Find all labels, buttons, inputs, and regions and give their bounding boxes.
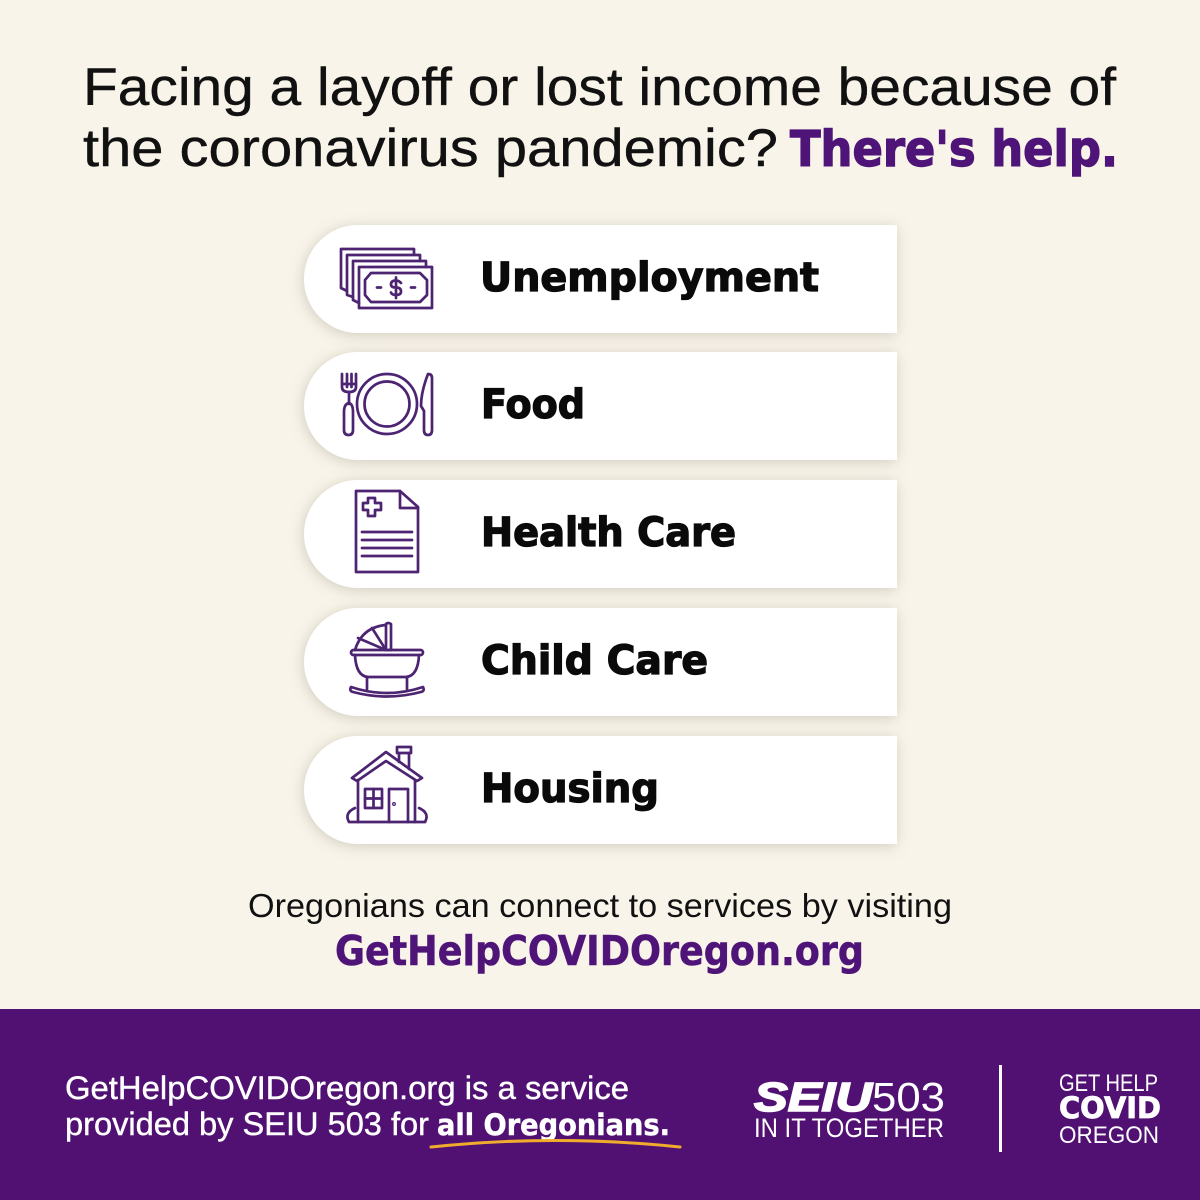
panel: health care [304, 480, 897, 588]
title [83, 58, 1118, 178]
logo: SEIU 503: 503 [872, 1074, 945, 1120]
label: child care: Child Care [481, 638, 708, 684]
logo: get help covid oregon: OREGON [1059, 1122, 1159, 1149]
title: Facing a layoff or lost income because of [83, 58, 1116, 117]
logo: get help covid oregon: COVID [1059, 1091, 1161, 1125]
icon: baby crib [350, 623, 424, 696]
call to action: Oregonians can connect to services by visiting [248, 887, 952, 924]
footer text: all Oregonians. [437, 1108, 670, 1142]
call to action: GetHelpCOVIDOregon.org [335, 927, 864, 975]
icon: medical document [356, 491, 418, 572]
panel: housing [304, 736, 897, 844]
icon: money [341, 249, 432, 308]
icon: house [347, 747, 427, 822]
panel: child care [304, 608, 897, 716]
footer band [0, 1009, 1200, 1200]
icon: plate and cutlery [342, 374, 432, 435]
logo: SEIU 503 [754, 1074, 945, 1143]
yellow underline [431, 1140, 680, 1147]
logo: get help covid oregon: GET HELP [1059, 1070, 1158, 1097]
label: unemployment: Unemployment [480, 255, 819, 301]
panel: food [304, 352, 897, 460]
call to action [248, 887, 952, 975]
footer text: GetHelpCOVIDOregon.org is a service [65, 1070, 629, 1106]
logo: get help covid oregon [1059, 1070, 1161, 1149]
logo: SEIU 503: SEIU [754, 1074, 874, 1120]
panel: unemployment [304, 225, 897, 333]
label: housing: Housing [481, 766, 659, 812]
logo: SEIU 503: IN IT TOGETHER [754, 1113, 944, 1143]
footer text [65, 1070, 670, 1142]
label: food: Food [481, 382, 585, 428]
title: the coronavirus pandemic? [83, 119, 778, 178]
divider [999, 1065, 1002, 1152]
footer text: provided by SEIU 503 for [65, 1106, 429, 1142]
title: There's help. [790, 121, 1118, 178]
label: health care: Health Care [481, 510, 736, 556]
